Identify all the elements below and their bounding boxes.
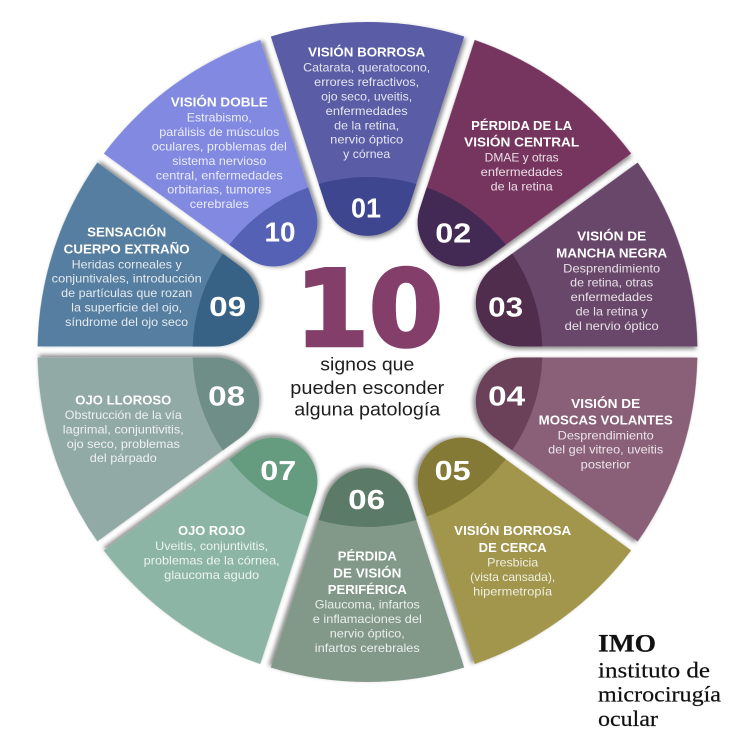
heading 08: OJO LLOROSO: [75, 393, 171, 407]
number 04: 04: [488, 381, 526, 412]
text 06: Glaucoma, infartos: [315, 599, 420, 612]
central subtitle: signos que: [320, 355, 414, 375]
number 09: 09: [209, 291, 246, 322]
text 10: oculares, problemas del: [152, 140, 287, 154]
panel: 03 visión de mancha negra: [448, 158, 711, 408]
text 03: de la retina y: [576, 305, 648, 318]
text 07: glaucoma agudo: [164, 569, 259, 582]
text 01: Catarata, queratocono,: [303, 62, 430, 75]
heading 04: MOSCAS VOLANTES: [539, 414, 673, 428]
panel: 07 ojo rojo: [95, 389, 377, 676]
text 08: ojo seco, problemas: [67, 438, 180, 451]
heading 02: [464, 118, 580, 150]
text 06: e inflamaciones del: [313, 613, 422, 626]
text 08: del párpado: [90, 452, 157, 465]
heading 03: VISIÓN DE: [577, 228, 646, 243]
text 06: nervio óptico,: [330, 628, 405, 640]
number 05: 05: [435, 455, 471, 486]
text 03: [563, 262, 660, 333]
central title: big number 10: 10: [295, 248, 443, 370]
heading 06: PÉRDIDA: [338, 549, 397, 564]
text 07: [144, 540, 280, 582]
segment shape 01: [271, 22, 464, 236]
text 06: [313, 599, 422, 655]
text 03: del nervio óptico: [565, 320, 659, 333]
text 10: central, enfermedades: [156, 169, 283, 182]
heading 01: VISIÓN BORROSA: [308, 45, 425, 60]
text 01: errores refractivos,: [314, 76, 419, 89]
heading 09: SENSACIÓN: [87, 225, 166, 240]
heading 05: [454, 523, 571, 555]
text 04: Desprendimiento: [558, 429, 654, 442]
logo: IMO instituto de microcirugía ocular: IMO: [598, 629, 656, 658]
heading 09: [64, 225, 190, 256]
segment shape 04: [448, 296, 711, 546]
text 10: sistema nervioso: [172, 155, 266, 168]
text 05: [470, 557, 555, 598]
text 08: lagrimal, conjuntivitis,: [63, 423, 184, 436]
text 06: infartos cerebrales: [315, 642, 420, 655]
text 09: Heridas corneales y: [72, 258, 182, 271]
text 10: orbitarias, tumores: [167, 184, 272, 197]
number 01: 01: [351, 192, 381, 223]
logo: IMO instituto de microcirugía ocular: instituto de: [598, 657, 710, 682]
heading 03: MANCHA NEGRA: [556, 246, 667, 260]
panel: 04 visión de moscas volantes: [448, 296, 711, 546]
number 02: 02: [435, 217, 471, 248]
segment shape 10: [95, 28, 377, 315]
heading 05: DE CERCA: [479, 541, 547, 555]
text 08: Obstrucción de la vía: [65, 409, 182, 422]
heading 10: VISIÓN DOBLE: [171, 95, 268, 110]
text 01: enfermedades: [326, 105, 408, 118]
panel: 05 visión borrosa de cerca: [358, 389, 640, 676]
segment shape 09: [24, 158, 287, 408]
segment shape 02: [358, 28, 640, 315]
number 08: 08: [208, 381, 245, 412]
text 09: de partículas que rozan: [61, 287, 192, 300]
text 04: [548, 429, 663, 471]
segment shape 06: [271, 468, 464, 682]
number 07: 07: [260, 455, 296, 486]
heading 05: VISIÓN BORROSA: [454, 523, 571, 538]
heading 06: PERIFÉRICA: [328, 582, 407, 597]
text 02: de la retina: [491, 181, 553, 194]
text 01: y córnea: [343, 148, 391, 161]
text 09: síndrome del ojo seco: [65, 316, 188, 329]
text 03: Desprendimiento: [563, 262, 660, 275]
text 04: posterior: [581, 458, 631, 471]
central subtitle: [290, 355, 444, 420]
text 02: [481, 152, 563, 194]
heading 02: VISIÓN CENTRAL: [464, 135, 580, 150]
text 05: Presbicia: [487, 557, 539, 570]
heading 02: PÉRDIDA DE LA: [471, 118, 572, 133]
central subtitle: pueden esconder: [290, 378, 444, 398]
heading 04: VISIÓN DE: [571, 396, 640, 411]
text 01: [303, 62, 430, 161]
panel: 10 visión doble: [95, 28, 377, 315]
central subtitle: alguna patología: [294, 400, 441, 420]
text 09: [52, 258, 202, 329]
heading 09: CUERPO EXTRAÑO: [64, 241, 190, 256]
heading 06: DE VISIÓN: [333, 565, 401, 580]
text 10: cerebrales: [190, 198, 249, 211]
text 10: [152, 112, 287, 211]
text 04: del gel vitreo, uveitis: [548, 444, 663, 457]
panel: 08 ojo lloroso: [24, 296, 287, 546]
text 02: enfermedades: [481, 166, 563, 179]
text 01: de la retina,: [334, 119, 399, 132]
text 03: de retina, otras: [570, 277, 653, 290]
text 02: DMAE y otras: [485, 152, 559, 165]
logo: IMO instituto de microcirugía ocular: ocular: [598, 706, 659, 731]
logo: IMO instituto de microcirugía ocular: microcirugía: [598, 682, 721, 707]
segment shape 05: [358, 389, 640, 676]
heading 06: [328, 549, 407, 597]
text 07: problemas de la córnea,: [144, 554, 280, 567]
text 10: Estrabismo,: [187, 112, 252, 125]
text 03: enfermedades: [571, 291, 653, 304]
text 01: nervio óptico: [330, 134, 403, 147]
text 05: hipermetropía: [473, 585, 553, 598]
text 09: conjuntivales, introducción: [52, 273, 202, 286]
text 01: ojo seco, uveitis,: [321, 90, 412, 104]
text 10: parálisis de músculos: [159, 126, 280, 139]
heading 03: [556, 228, 667, 260]
segment shape 07: [95, 389, 377, 676]
text 07: Uveitis, conjuntivitis,: [155, 540, 268, 553]
segment shape 08: [24, 296, 287, 546]
number 10: 10: [264, 217, 296, 248]
heading 04: [539, 396, 673, 428]
panel: 09 sensación cuerpo extraño: [24, 158, 287, 408]
panel: 01 visión borrosa: [271, 22, 464, 236]
panel: 06 pérdida de visión periférica: [271, 468, 464, 682]
segment shape 03: [448, 158, 711, 408]
number 06: 06: [348, 484, 385, 515]
text 08: [63, 409, 184, 465]
text 09: la superficie del ojo,: [71, 302, 182, 314]
heading 07: OJO ROJO: [178, 524, 245, 538]
panel: 02 pérdida de la visión central: [358, 28, 640, 315]
text 05: (vista cansada),: [470, 571, 555, 584]
logo: IMO instituto de microcirugía ocular: [598, 629, 721, 731]
number 03: 03: [488, 292, 523, 323]
